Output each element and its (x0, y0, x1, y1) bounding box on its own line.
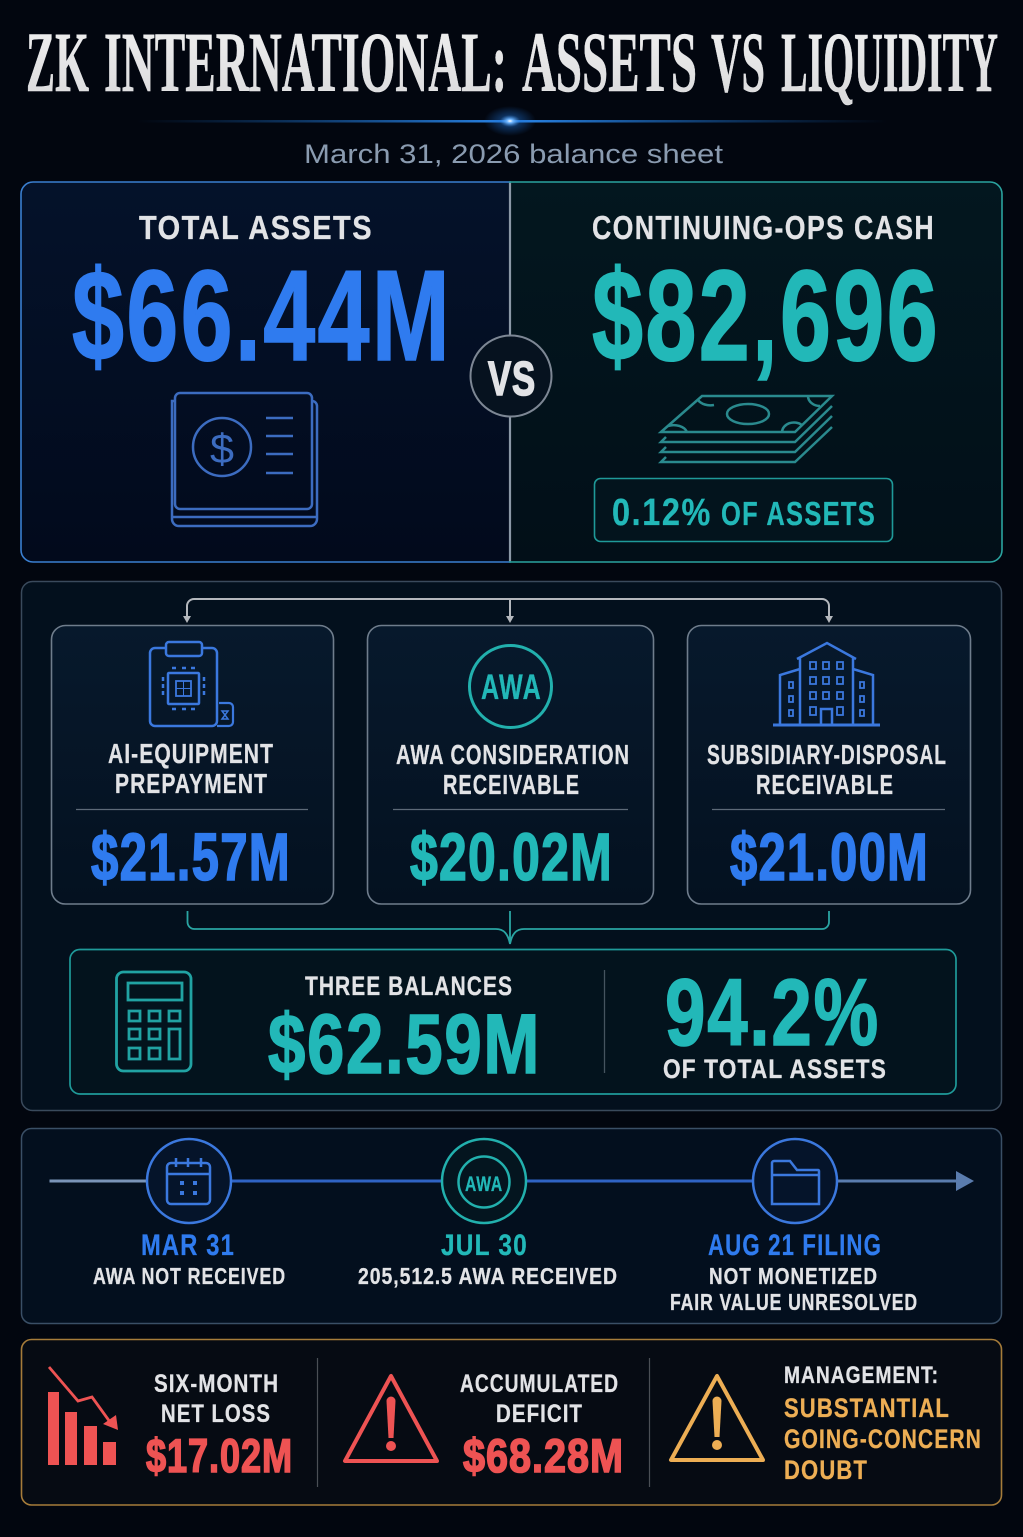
label: AI-EQUIPMENT (108, 738, 274, 769)
comparison panel (21, 182, 1002, 562)
risk: six-month net loss (48, 1367, 293, 1482)
value: $68.28M (463, 1429, 624, 1482)
label (154, 1370, 279, 1428)
value: $20.02M (410, 820, 613, 895)
callout: share of assets: OF ASSETS (721, 495, 876, 532)
title: VS (711, 14, 765, 110)
panel: continuing-ops cash (510, 182, 1002, 562)
label (396, 739, 630, 800)
cash label: CONTINUING-OPS CASH (592, 209, 935, 246)
total assets value: $66.44M (72, 244, 452, 388)
header (26, 14, 998, 169)
icon: falling bar chart (48, 1367, 118, 1465)
notes: NOT MONETIZED (709, 1263, 878, 1289)
card: AWA consideration receivable (368, 626, 654, 904)
icon: AWA token (470, 646, 552, 728)
label: ACCUMULATED (460, 1370, 619, 1398)
glowing divider (137, 106, 887, 136)
icon: AWA token: AWA (481, 668, 542, 707)
label (108, 738, 274, 799)
going-concern statement: SUBSTANTIAL (784, 1393, 950, 1423)
icon: office building (773, 643, 880, 725)
going-concern statement: DOUBT (784, 1455, 868, 1485)
risk: going-concern doubt (671, 1362, 982, 1485)
panel: timeline (22, 1128, 1002, 1324)
three balances label: THREE BALANCES (305, 971, 513, 1001)
note: 205,512.5 AWA RECEIVED (358, 1263, 618, 1289)
percentage value: 94.2% (665, 960, 880, 1066)
panel: total assets (21, 182, 510, 562)
callout: share of assets (594, 478, 892, 542)
value: $21.57M (91, 820, 291, 895)
vs badge: VS (488, 353, 536, 406)
vs divider (509, 183, 511, 561)
icon: red warning triangle (345, 1376, 437, 1461)
icon: AI chip clipboard (150, 642, 233, 726)
label: RECEIVABLE (756, 769, 894, 800)
arrows: branch into three balances (183, 599, 833, 623)
management label: MANAGEMENT: (784, 1362, 939, 1389)
timeline arrow (50, 1171, 974, 1191)
three balances value: $62.59M (268, 997, 541, 1091)
title: INTERNATIONAL: (104, 14, 507, 110)
panel: risk indicators (22, 1340, 1002, 1505)
label: NET LOSS (161, 1400, 271, 1428)
date: MAR 31 (141, 1229, 235, 1262)
total assets label: TOTAL ASSETS (139, 209, 373, 246)
date: JUL 30 (441, 1229, 528, 1262)
icon: AWA token: AWA (465, 1173, 503, 1196)
notes (670, 1263, 918, 1315)
icon: balance sheet document (172, 393, 317, 526)
risk: accumulated deficit (345, 1370, 624, 1482)
value: $17.02M (146, 1429, 293, 1482)
value: $21.00M (730, 820, 929, 895)
icon: stack of cash (661, 396, 832, 462)
icon: calculator (116, 972, 191, 1071)
panel: three balances summary (70, 950, 956, 1094)
icon: balance sheet document: $ (210, 425, 234, 472)
label (707, 739, 947, 800)
vs badge (470, 336, 552, 416)
label: SIX-MONTH (154, 1370, 279, 1398)
date: AUG 21 FILING (708, 1229, 882, 1262)
notes: FAIR VALUE UNRESOLVED (670, 1289, 918, 1315)
milestone: Jul 30 (358, 1139, 618, 1289)
label: DEFICIT (496, 1400, 583, 1428)
title: ASSETS (522, 14, 697, 110)
icon: folder (753, 1139, 837, 1223)
panel: asset breakdown (22, 582, 1002, 1110)
going-concern statement (784, 1393, 982, 1485)
milestone: Mar 31 (93, 1139, 286, 1289)
card: subsidiary-disposal receivable (688, 626, 970, 904)
subtitle: March 31, 2026 balance sheet (304, 139, 724, 169)
callout: share of assets: 0.12% (612, 492, 712, 534)
label: PREPAYMENT (115, 768, 268, 799)
milestone: Aug 21 filing (670, 1139, 918, 1315)
title: ZK (26, 14, 89, 110)
note: AWA NOT RECEIVED (93, 1263, 286, 1289)
icon: amber warning triangle (671, 1376, 763, 1460)
card: AI-equipment prepayment (52, 626, 334, 904)
label (460, 1370, 619, 1428)
label: RECEIVABLE (443, 769, 580, 800)
bracket: combine balances (188, 911, 829, 944)
label: AWA CONSIDERATION (396, 739, 630, 770)
icon: AWA token (442, 1139, 526, 1223)
icon: calendar (147, 1139, 231, 1223)
percentage caption: OF TOTAL ASSETS (663, 1054, 887, 1084)
